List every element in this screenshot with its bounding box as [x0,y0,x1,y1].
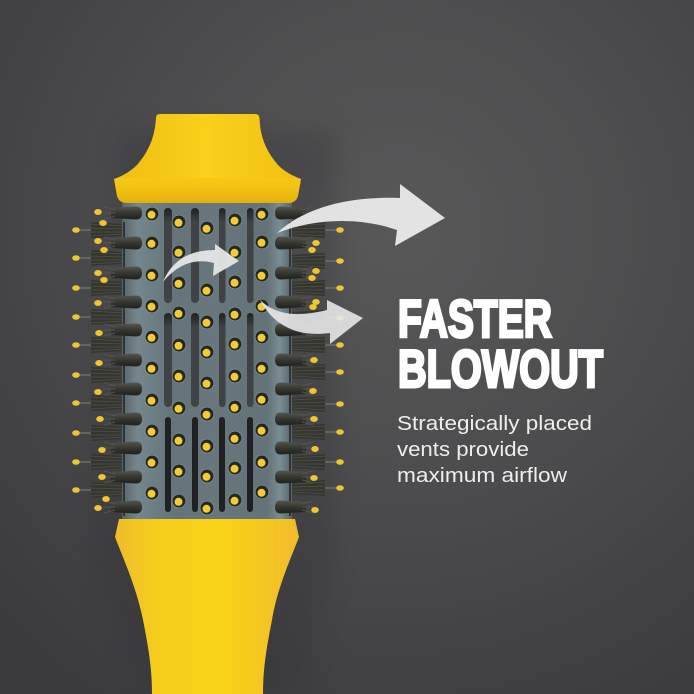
right back bristle rows [292,222,344,496]
barrel edge lines [124,222,290,516]
airflow arrows [163,184,445,344]
hair brush [72,114,344,694]
left back bristle rows [72,222,124,498]
lower handle [115,519,299,694]
upper vents [164,208,254,303]
right front knob bristles [275,206,314,514]
arrow: top large [277,184,445,246]
arrow: lower [260,300,363,344]
heading line 1: FASTER [398,290,552,349]
description line 1: Strategically placed [397,413,592,435]
description line 3: maximum airflow [397,465,568,487]
yellow bristle pins [145,207,269,515]
top cap [114,114,301,203]
left front knob bristles [103,206,142,514]
barrel [122,198,292,524]
yellow bristle tips [94,209,320,513]
description line 2: vents provide [397,439,529,461]
heading [398,290,603,399]
description text [397,413,592,487]
heading line 2: BLOWOUT [398,340,603,399]
lower vents [165,417,253,512]
middle vents [164,313,254,407]
brush shadow [90,130,335,694]
arrow: small inner [163,244,239,282]
